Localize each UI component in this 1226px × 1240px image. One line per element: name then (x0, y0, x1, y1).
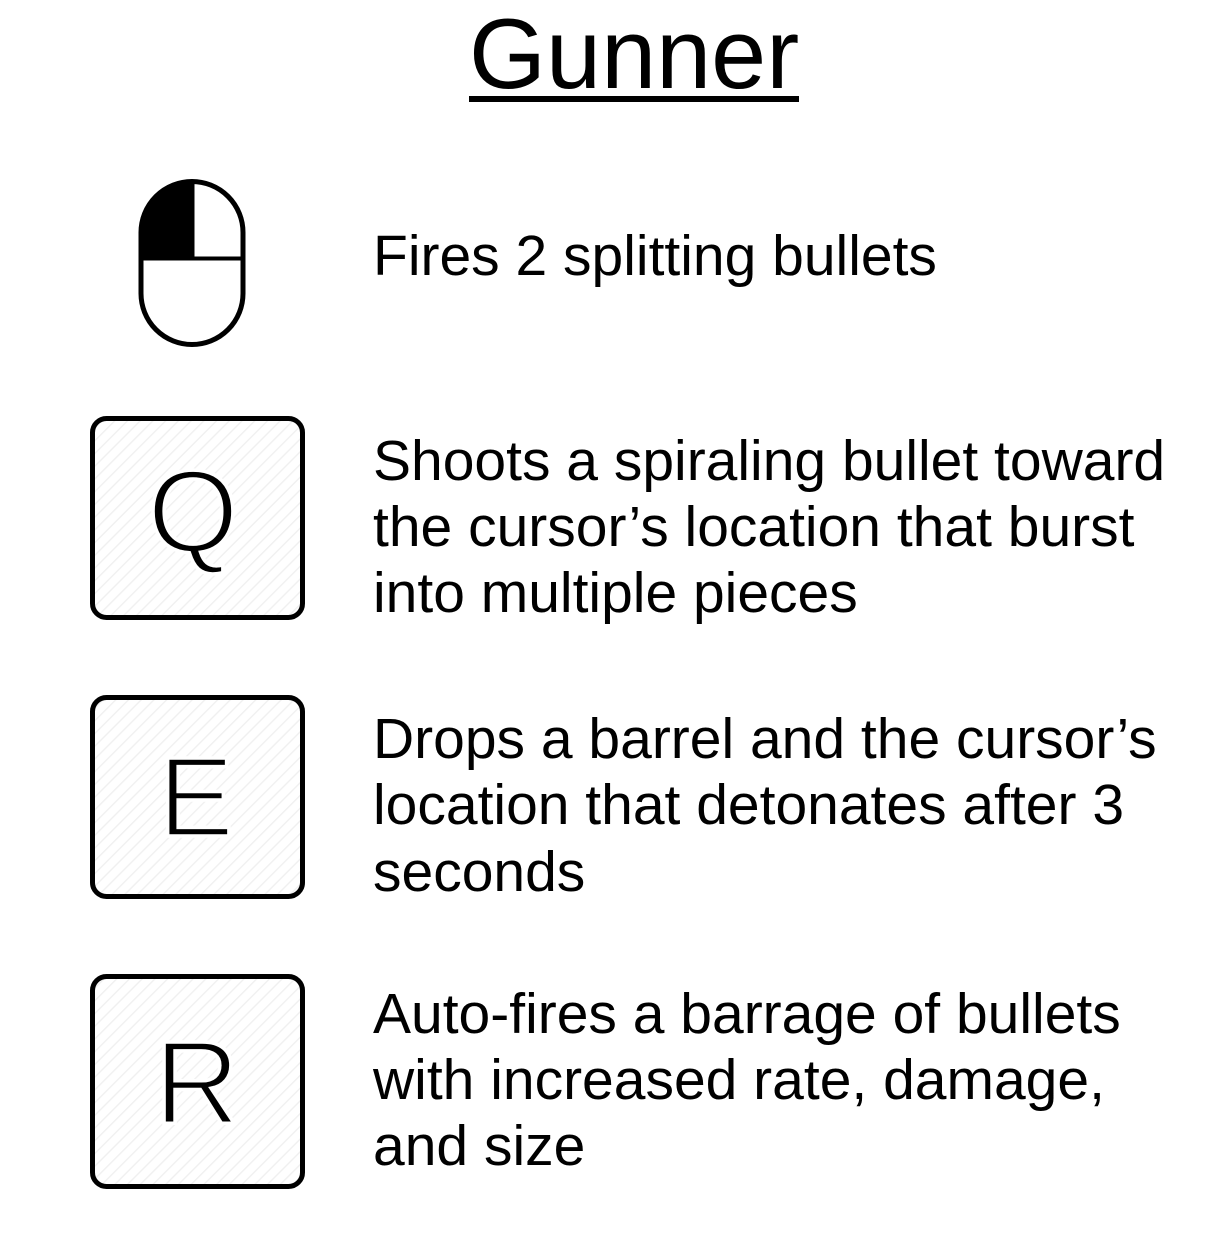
text: R ability description: Auto-fires a barrage of bullets (373, 982, 1121, 1046)
text: left click description: Fires 2 splitting bullets (373, 224, 937, 288)
icon: R key (92, 976, 302, 1186)
text: R ability description: and size (373, 1114, 585, 1178)
text: R ability description: with increased rate, damage, (373, 1048, 1105, 1112)
icon: R key: R (154, 1017, 240, 1149)
text: Q ability description (373, 428, 1165, 625)
text: E ability description (373, 707, 1157, 904)
icon: E key (92, 698, 302, 896)
icon: Q key (92, 418, 302, 618)
text: E ability description: seconds (373, 840, 585, 904)
icon: E key: E (158, 734, 234, 860)
text: Q ability description: into multiple pieces (373, 561, 858, 625)
text: Q ability description: the cursor’s location that burst (373, 495, 1134, 559)
text: E ability description: Drops a barrel and the cursor’s (373, 707, 1157, 771)
title: Gunner (469, 0, 799, 109)
icon: mouse with left button highlighted (141, 181, 243, 344)
icon: Q key: Q (147, 446, 239, 577)
text: E ability description: location that detonates after 3 (373, 773, 1124, 837)
text: Q ability description: Shoots a spiraling bullet toward (373, 428, 1165, 492)
text: R ability description (372, 982, 1121, 1178)
